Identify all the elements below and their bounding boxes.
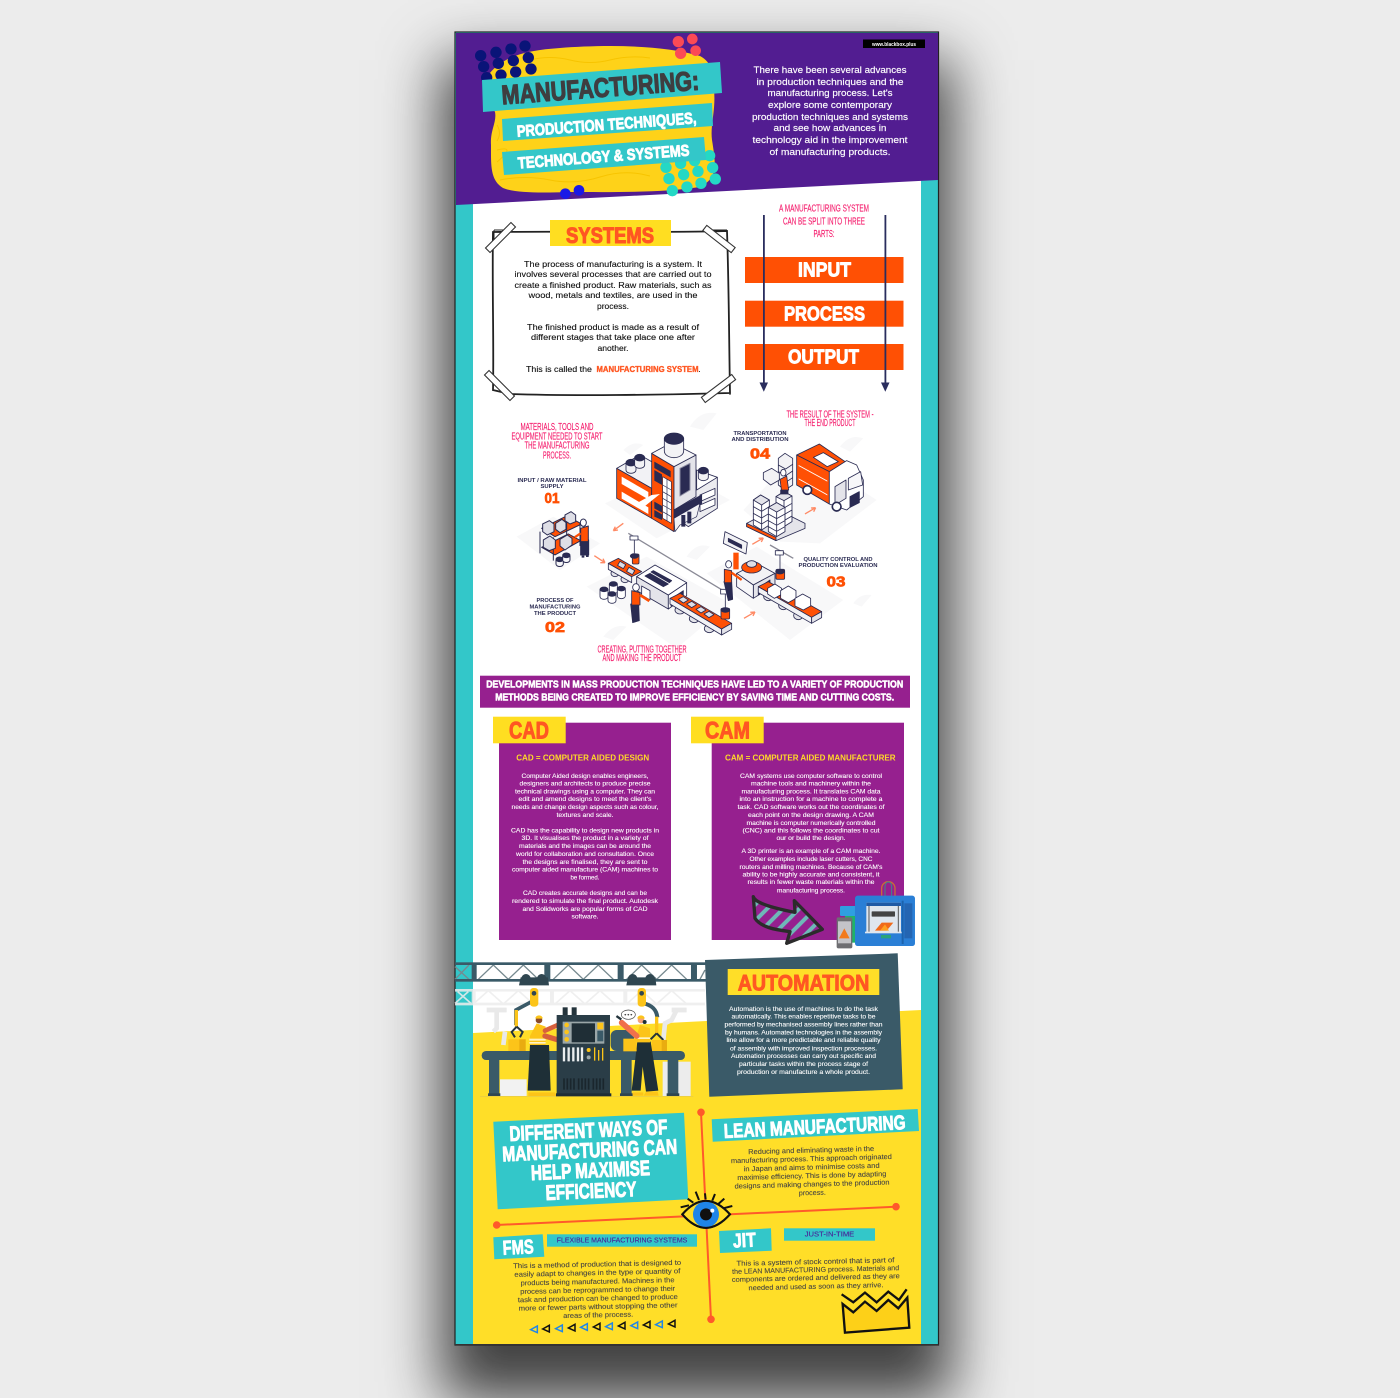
CAD body text: materials and the images can be around the bbox=[519, 843, 651, 850]
lean body text: process. bbox=[799, 1190, 826, 1197]
second machine bbox=[723, 532, 775, 598]
output bar: OUTPUT bbox=[788, 346, 859, 368]
intro text: manufacturing process. Let's bbox=[768, 88, 893, 98]
step 01 label bbox=[518, 478, 587, 507]
lean body text: maximise efficiency. This is done by adapting bbox=[737, 1171, 887, 1182]
systems body text: wood, metals and textiles, are used in the bbox=[527, 290, 698, 300]
automation body text: Automation processes can carry out specific and bbox=[731, 1053, 876, 1060]
step 04 label: 04 bbox=[750, 446, 771, 462]
CAD tag bbox=[493, 717, 566, 744]
CAD body text: edit and amend designs to meet the client's bbox=[518, 796, 652, 803]
step 01 label: 01 bbox=[544, 490, 560, 507]
yellow lower background bbox=[473, 1010, 921, 1344]
pink intro note: A MANUFACTURING SYSTEM bbox=[779, 202, 869, 214]
hand drawn frame bbox=[493, 230, 730, 395]
step 04 label bbox=[732, 431, 788, 462]
CAM body text: into an instruction for a machine to complete a bbox=[740, 796, 883, 803]
step 03 label: QUALITY CONTROL AND bbox=[804, 557, 872, 563]
intro text: in production techniques and the bbox=[756, 77, 904, 87]
CAM body text: machine tools and machinery within the bbox=[751, 780, 871, 788]
heading: different ways of manufacturing: DIFFERENT WAYS OF bbox=[509, 1116, 668, 1146]
JIT body text: the LEAN MANUFACTURING process. Materials and bbox=[732, 1265, 899, 1276]
robot arm left bbox=[508, 974, 549, 1051]
speech bubble bbox=[621, 1010, 635, 1019]
JIT tag bbox=[719, 1228, 772, 1253]
first worker bbox=[631, 584, 649, 623]
pink intro note: CAN BE SPLIT INTO THREE bbox=[783, 216, 865, 228]
panel: three parts of a system bbox=[745, 202, 904, 392]
automation body text: automatically. This enables repetitive tasks to be bbox=[732, 1014, 876, 1021]
systems heading: SYSTEMS bbox=[566, 223, 654, 248]
CAM body text: (CNC) and this follows the coordinates to cut bbox=[742, 828, 880, 834]
poster background bbox=[455, 32, 938, 1345]
CAD body text: be formed. bbox=[570, 874, 600, 881]
intro text: of manufacturing products. bbox=[770, 147, 890, 157]
heading: different ways of manufacturing: EFFICIENCY bbox=[545, 1178, 637, 1205]
pink note: result: THE RESULT OF THE SYSTEM - bbox=[786, 408, 874, 420]
robot arm right bbox=[626, 974, 667, 1051]
second belt bbox=[758, 582, 822, 623]
automation body text: production or manufacture a whole product. bbox=[737, 1069, 870, 1076]
systems body text: involves several processes that are carried out to bbox=[514, 269, 712, 279]
panel: FMS bbox=[493, 1234, 697, 1333]
CAM body text: manufacturing process. bbox=[777, 887, 845, 894]
panel: JIT bbox=[719, 1228, 909, 1333]
pink note: result bbox=[786, 408, 874, 429]
pink intro note bbox=[779, 202, 869, 240]
step 04 label: TRANSPORTATION bbox=[734, 431, 786, 437]
FMS full name: FLEXIBLE MANUFACTURING SYSTEMS bbox=[557, 1236, 687, 1245]
CAM body text: A 3D printer is an example of a CAM machine. bbox=[742, 848, 881, 855]
CAM body text: task. CAD software works out the coordinates of bbox=[738, 804, 885, 811]
step 02 label bbox=[530, 598, 580, 636]
banner: developments in mass production: METHODS BEING CREATED TO IMPROVE EFFICIENCY BY SAVING TIME AND CUTTING COSTS. bbox=[495, 692, 894, 704]
intro text bbox=[752, 65, 908, 157]
CAM body text bbox=[738, 773, 885, 894]
FMS body text bbox=[513, 1260, 682, 1321]
systems body text bbox=[514, 259, 712, 374]
process bar: PROCESS bbox=[784, 304, 865, 326]
step 04 label: AND DISTRIBUTION bbox=[732, 437, 788, 443]
FMS body text: more or fewer parts without stopping the other bbox=[519, 1302, 678, 1313]
website badge: www.blackbox.plus bbox=[871, 42, 916, 48]
CAD body text: and Solidworks are popular forms of CAD bbox=[522, 906, 648, 913]
JIT full name bbox=[784, 1228, 875, 1241]
step 03 label: 03 bbox=[826, 574, 846, 590]
CAD body text bbox=[511, 773, 659, 920]
systems body text: . bbox=[698, 364, 701, 374]
JIT body text: This is a system of stock control that is part of bbox=[736, 1257, 895, 1268]
systems body text: process. bbox=[597, 301, 629, 311]
automation body text: line allow for a more predictable and reliable quality bbox=[726, 1037, 881, 1044]
step 01 label: INPUT / RAW MATERIAL bbox=[518, 478, 587, 484]
FMS body text: process can be reprogrammed to change their bbox=[520, 1286, 676, 1296]
step 02 label: MANUFACTURING bbox=[530, 604, 580, 610]
manufacturing process diagram bbox=[512, 408, 878, 664]
arrow: right bbox=[881, 215, 890, 392]
icon: assembly conveyor lines bbox=[600, 532, 822, 635]
step 01 label: SUPPLY bbox=[540, 484, 564, 490]
icon: shelves and worker bbox=[540, 512, 589, 567]
CAM body text: results in fewer waste materials within the bbox=[748, 879, 875, 886]
icon: blue dots bbox=[560, 185, 584, 199]
CAD body text: computer aided manufacture (CAM) machines to bbox=[512, 866, 658, 874]
worker right bbox=[616, 1015, 659, 1096]
CAM body text: routers and milling machines. Because of CAM's bbox=[740, 864, 882, 871]
FMS body text: easily adapt to changes in the type or quantity of bbox=[514, 1268, 680, 1279]
step 03 label bbox=[798, 557, 878, 590]
panel: CAM bbox=[691, 717, 904, 940]
poster bottom edge bbox=[456, 1344, 938, 1345]
JIT body text: needed and used as soon as they arrive. bbox=[748, 1282, 884, 1292]
lean heading: LEAN MANUFACTURING bbox=[723, 1112, 906, 1143]
CAD body text: CAD creates accurate designs and can be bbox=[523, 890, 647, 897]
panel: CAD bbox=[493, 717, 671, 940]
pink note: creating: AND MAKING THE PRODUCT bbox=[602, 652, 682, 664]
subtitle: production techniques: PRODUCTION TECHNIQUES, bbox=[516, 110, 697, 141]
JIT full name: JUST-IN-TIME bbox=[805, 1230, 854, 1238]
CAM body text: each point on the design drawing. A CAM bbox=[748, 812, 874, 819]
raw cylinders bbox=[600, 582, 625, 603]
CAD body text: world for collaboration and consultation. Once bbox=[515, 851, 654, 858]
heading: different ways of manufacturing: HELP MAXIMISE bbox=[530, 1157, 650, 1185]
CAM body text: ability to be highly accurate and consistent, it bbox=[742, 872, 880, 878]
pink note: creating bbox=[598, 644, 687, 664]
icon: 3D printer and phone bbox=[837, 882, 915, 948]
FMS body text: products being manufactured. Machines in the bbox=[520, 1277, 675, 1287]
CAD body text: the designs are finalised, they are sent to bbox=[522, 859, 648, 866]
floor line bbox=[480, 1095, 693, 1098]
second worker bbox=[724, 561, 742, 601]
systems body text: create a finished product. Raw materials, such as bbox=[514, 280, 712, 290]
intro text: There have been several advances bbox=[754, 65, 907, 75]
lean body text: in Japan and aims to minimise costs and bbox=[744, 1163, 880, 1173]
console behind right worker bbox=[611, 1030, 634, 1051]
pink note: materials: MATERIALS, TOOLS AND bbox=[520, 421, 594, 433]
automation body text bbox=[724, 1006, 883, 1076]
CAD body text: technical drawings using a computer. They can bbox=[515, 788, 655, 796]
first belt right bbox=[670, 593, 732, 635]
panel: lean manufacturing bbox=[712, 1109, 919, 1199]
gantry truss bbox=[455, 962, 708, 1005]
JIT body text: components are ordered and delivered as they are bbox=[732, 1273, 900, 1284]
heading: different ways of manufacturing: MANUFACTURING CAN bbox=[502, 1136, 678, 1166]
ghost crates bbox=[500, 1079, 527, 1096]
pink intro note: PARTS: bbox=[814, 228, 834, 240]
CAM body text: machine is computer numerically controlled bbox=[746, 820, 876, 827]
automation body text: Automation is the use of machines to do the task bbox=[729, 1006, 879, 1013]
heading: different ways of manufacturing bbox=[493, 1113, 688, 1209]
systems body text: MANUFACTURING SYSTEM bbox=[596, 364, 698, 374]
FMS body text: task and production can be changed to produce bbox=[518, 1294, 678, 1304]
CAD heading: CAD = COMPUTER AIDED DESIGN bbox=[516, 752, 649, 762]
conveyor bbox=[482, 1051, 685, 1060]
input bar: INPUT bbox=[798, 260, 851, 282]
CAM tag: CAM bbox=[705, 718, 750, 744]
pink note: materials: THE MANUFACTURING bbox=[524, 440, 590, 452]
CAM body text: manufacturing process. It translates CAM data bbox=[742, 788, 881, 796]
worker left bbox=[528, 1015, 560, 1096]
arrow: left bbox=[760, 215, 768, 392]
first belt left bbox=[608, 558, 642, 583]
step 02 label: 02 bbox=[545, 619, 565, 636]
CAD tag: CAD bbox=[509, 718, 549, 744]
icon: navy dots bbox=[475, 40, 531, 61]
CAM body text: Other examples include laser cutters, CNC bbox=[750, 856, 873, 863]
JIT body text bbox=[731, 1257, 900, 1293]
CAD body text: rendered to simulate the final product. Autodesk bbox=[512, 898, 659, 905]
lean body text: Reducing and eliminating waste in the bbox=[748, 1146, 874, 1156]
automation body text: performed by mechanised assembly lines rather than bbox=[724, 1022, 883, 1029]
automation body text: by humans. Automated technologies in the assembly bbox=[725, 1029, 883, 1036]
pink note: result: THE END PRODUCT bbox=[804, 417, 856, 429]
CAD body text: designers and architects to produce precise bbox=[520, 780, 651, 788]
step 02 label: PROCESS OF bbox=[536, 598, 574, 604]
header band bbox=[456, 33, 938, 205]
FMS body text: areas of the process. bbox=[563, 1312, 633, 1320]
automation body text: of assembly with improved inspection processes. bbox=[730, 1045, 877, 1052]
CAD body text: software. bbox=[572, 914, 599, 920]
ghost robot arms bbox=[487, 1008, 687, 1045]
icon: teal dots bbox=[660, 150, 721, 196]
CAD body text: textures and scale. bbox=[556, 812, 614, 819]
icon: navy dots lower bbox=[478, 52, 537, 83]
automation body text: particular tasks within the process stage of bbox=[739, 1061, 868, 1068]
title: manufacturing: MANUFACTURING: bbox=[500, 66, 700, 110]
CAM body text: CAM systems use computer software to control bbox=[740, 773, 882, 780]
icon: crown bbox=[842, 1289, 909, 1333]
icon: delivery truck and pallets bbox=[747, 444, 863, 541]
step 03 label: PRODUCTION EVALUATION bbox=[798, 563, 878, 569]
panel: systems bbox=[485, 220, 736, 402]
intro text: and see how advances in bbox=[774, 123, 886, 133]
tape corners bbox=[485, 223, 736, 402]
systems body text: different stages that take place one after bbox=[531, 332, 695, 342]
icon: triangle row bbox=[531, 1320, 675, 1333]
pink note: materials: PROCESS. bbox=[543, 450, 571, 462]
panel: automation bbox=[705, 953, 903, 1097]
systems body text: The finished product is made as a result of bbox=[527, 322, 700, 332]
icon: red dots bbox=[673, 34, 701, 59]
systems body text: The process of manufacturing is a system. It bbox=[524, 259, 703, 269]
process bar bbox=[745, 301, 904, 327]
ghost truss bbox=[455, 990, 705, 1005]
first machine bbox=[637, 565, 687, 609]
CAM body text: our or build the design. bbox=[776, 835, 846, 842]
arrows between process steps bbox=[594, 508, 816, 618]
CAD body text: 3D. It visualises the product in a variety of bbox=[522, 835, 649, 842]
soft floor shadows bbox=[517, 413, 877, 648]
intro text: production techniques and systems bbox=[752, 112, 908, 122]
FMS tag: FMS bbox=[502, 1236, 534, 1260]
step 02 label: THE PRODUCT bbox=[534, 611, 577, 617]
CAD body text: CAD has the capability to design new products in bbox=[511, 828, 659, 834]
lean body text bbox=[731, 1145, 893, 1199]
systems body text: This is called the bbox=[526, 364, 592, 374]
pink note: creating: CREATING, PUTTING TOGETHER bbox=[598, 644, 687, 656]
icon: factory bbox=[617, 433, 717, 532]
title blob and dots bbox=[475, 34, 721, 199]
lean body text: manufacturing process. This approach originated bbox=[731, 1154, 892, 1165]
arrow: striped pointer to printer bbox=[753, 897, 822, 943]
CAD body text: needs and change design aspects such as colour, bbox=[512, 804, 659, 811]
lean body text: designs and making changes to the production bbox=[735, 1179, 890, 1191]
input bar bbox=[745, 257, 904, 283]
icon: eye bbox=[681, 1192, 732, 1228]
automation heading: AUTOMATION bbox=[738, 971, 869, 996]
CAD body text: Computer Aided design enables engineers, bbox=[522, 773, 649, 780]
intro text: technology aid in the improvement bbox=[752, 135, 908, 145]
pink note: materials: EQUIPMENT NEEDED TO START bbox=[512, 430, 603, 442]
banner: developments in mass production: DEVELOPMENTS IN MASS PRODUCTION TECHNIQUES HAVE LED TO A VARIETY OF PRODUCTION bbox=[486, 679, 903, 691]
pink note: materials bbox=[512, 421, 603, 462]
illustration: automated assembly line bbox=[480, 974, 693, 1097]
website badge bbox=[863, 40, 925, 48]
FMS body text: This is a method of production that is designed to bbox=[513, 1260, 681, 1270]
control machine bbox=[556, 1007, 611, 1096]
FMS full name bbox=[547, 1234, 697, 1247]
JIT tag: JIT bbox=[732, 1229, 756, 1253]
quadrant cross lines bbox=[494, 1110, 899, 1322]
systems body text: another. bbox=[598, 343, 628, 353]
CAM heading: CAM = COMPUTER AIDED MANUFACTURER bbox=[725, 752, 896, 762]
banner: developments in mass production bbox=[480, 676, 910, 708]
subtitle: technology and systems: TECHNOLOGY & SYSTEMS bbox=[517, 143, 690, 172]
page drop shadow bbox=[455, 32, 938, 1345]
intro text: explore some contemporary bbox=[768, 100, 892, 110]
output bar bbox=[745, 344, 904, 370]
